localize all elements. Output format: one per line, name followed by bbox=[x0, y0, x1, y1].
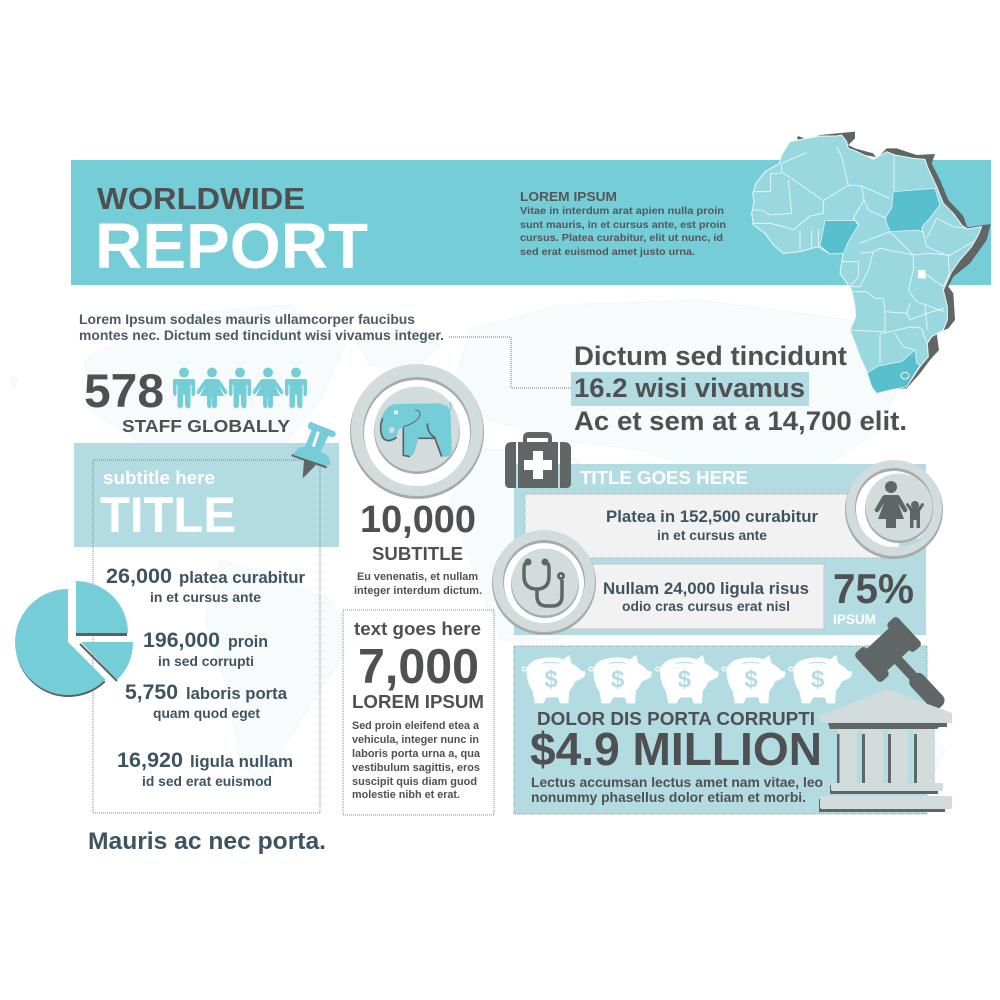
money headline bbox=[530, 708, 823, 805]
icon: piggy banks bbox=[522, 655, 852, 703]
icon: gavel bbox=[853, 615, 962, 726]
icon: mother and child badge bbox=[845, 460, 943, 559]
money headline: nonummy phasellus dolor etiam et morbi. bbox=[531, 790, 806, 805]
staff count bbox=[84, 364, 307, 436]
stat list: id sed erat euismod bbox=[142, 774, 272, 789]
dotted leader line bbox=[449, 337, 572, 388]
second row text: Nullam 24,000 ligula risus bbox=[603, 579, 809, 598]
header intro text: sed erat euismod amet justo urna. bbox=[520, 246, 695, 258]
main title: REPORT bbox=[95, 210, 368, 282]
staff count: 578 bbox=[84, 364, 164, 417]
first row text: in et cursus ante bbox=[657, 528, 767, 543]
money headline: DOLOR DIS PORTA CORRUPTI bbox=[537, 708, 815, 729]
panel: text box 7,000: text goes here bbox=[354, 619, 481, 639]
main title bbox=[95, 181, 368, 282]
headline statement bbox=[571, 341, 907, 436]
stat list: in et cursus ante bbox=[150, 590, 261, 605]
stat list: ligula nullam bbox=[190, 752, 293, 771]
panel: text box 7,000: vehicula, integer nunc in bbox=[352, 734, 479, 746]
stat list bbox=[106, 564, 305, 789]
intro paragraph: montes nec. Dictum sed tincidunt wisi vivamus integer. bbox=[79, 328, 444, 343]
second row text: odio cras cursus erat nisl bbox=[622, 599, 790, 614]
panel: text box 7,000: molestie nibh et erat. bbox=[352, 789, 460, 801]
staff count: STAFF GLOBALLY bbox=[122, 416, 290, 436]
panel: text box 7,000: LOREM IPSUM bbox=[352, 691, 484, 712]
panel: title banner: TITLE bbox=[100, 487, 236, 543]
money headline: $4.9 MILLION bbox=[530, 723, 822, 775]
headline statement: Ac et sem at a 14,700 elit. bbox=[574, 406, 907, 436]
first row text: Platea in 152,500 curabitur bbox=[606, 507, 818, 526]
stat list: 26,000 bbox=[106, 564, 172, 588]
stat list: 5,750 bbox=[125, 680, 178, 704]
panel: medical: IPSUM bbox=[833, 611, 876, 627]
stat: 10,000: SUBTITLE bbox=[372, 544, 463, 564]
panel: medical bbox=[514, 464, 926, 635]
header intro text: sunt mauris, in et cursus ante, est proin bbox=[520, 219, 726, 231]
panel: text box 7,000 bbox=[343, 610, 494, 815]
header intro text: Vitae in interdum arat apien nulla proin bbox=[520, 205, 724, 217]
icon: stethoscope badge bbox=[492, 530, 596, 635]
icon: people row bbox=[173, 368, 307, 408]
header intro text: cursus. Platea curabitur, elit ut nunc, id bbox=[520, 232, 723, 244]
panel: title banner bbox=[74, 443, 339, 813]
stat: 10,000: integer interdum dictum. bbox=[354, 585, 482, 597]
first row text bbox=[606, 507, 818, 543]
panel: text box 7,000: laboris porta urna a, qua bbox=[352, 748, 481, 760]
icon: medical case bbox=[505, 432, 571, 488]
header intro text bbox=[520, 190, 726, 258]
panel: savings bbox=[514, 646, 927, 814]
stat: 10,000: Eu venenatis, et nullam bbox=[357, 571, 478, 583]
second row text bbox=[603, 579, 809, 614]
icon: bank building bbox=[819, 689, 952, 812]
icon: elephant badge bbox=[350, 364, 484, 499]
header band bbox=[71, 160, 991, 285]
headline statement: Dictum sed tincidunt bbox=[574, 341, 847, 371]
stat: 75%: 75% bbox=[833, 565, 914, 612]
panel: text box 7,000: Sed proin eleifend etea a bbox=[352, 720, 480, 732]
icon: push pin bbox=[292, 422, 336, 478]
panel: text box 7,000: 7,000 bbox=[358, 640, 479, 694]
panel: text box 7,000: suscipit quis diam guod bbox=[352, 776, 477, 788]
heading: TITLE GOES HERE bbox=[580, 467, 748, 488]
panel: title banner: subtitle here bbox=[103, 468, 215, 488]
main title: WORLDWIDE bbox=[97, 181, 305, 216]
stat list: in sed corrupti bbox=[158, 654, 254, 669]
stat list: quam quod eget bbox=[153, 706, 260, 721]
money headline: Lectus accumsan lectus amet nam vitae, leo bbox=[531, 775, 823, 790]
stat list: platea curabitur bbox=[179, 568, 305, 587]
background world map bbox=[10, 300, 945, 790]
header intro text: LOREM IPSUM bbox=[520, 190, 617, 204]
stat: 10,000: 10,000 bbox=[360, 499, 476, 541]
stat list: 196,000 bbox=[143, 628, 220, 652]
pie chart bbox=[15, 581, 133, 697]
closing line: Mauris ac nec porta. bbox=[88, 828, 326, 855]
headline statement: 16.2 wisi vivamus bbox=[574, 373, 805, 403]
intro paragraph: Lorem Ipsum sodales mauris ullamcorper faucibus bbox=[79, 312, 415, 327]
intro paragraph bbox=[79, 312, 444, 343]
Africa map bbox=[752, 132, 991, 393]
stat list: laboris porta bbox=[186, 684, 288, 703]
stat list: 16,920 bbox=[117, 748, 183, 772]
stat: 10,000 bbox=[354, 499, 482, 597]
panel: text box 7,000: vestibulum sagittis, eros bbox=[352, 762, 480, 774]
stat list: proin bbox=[228, 632, 268, 651]
